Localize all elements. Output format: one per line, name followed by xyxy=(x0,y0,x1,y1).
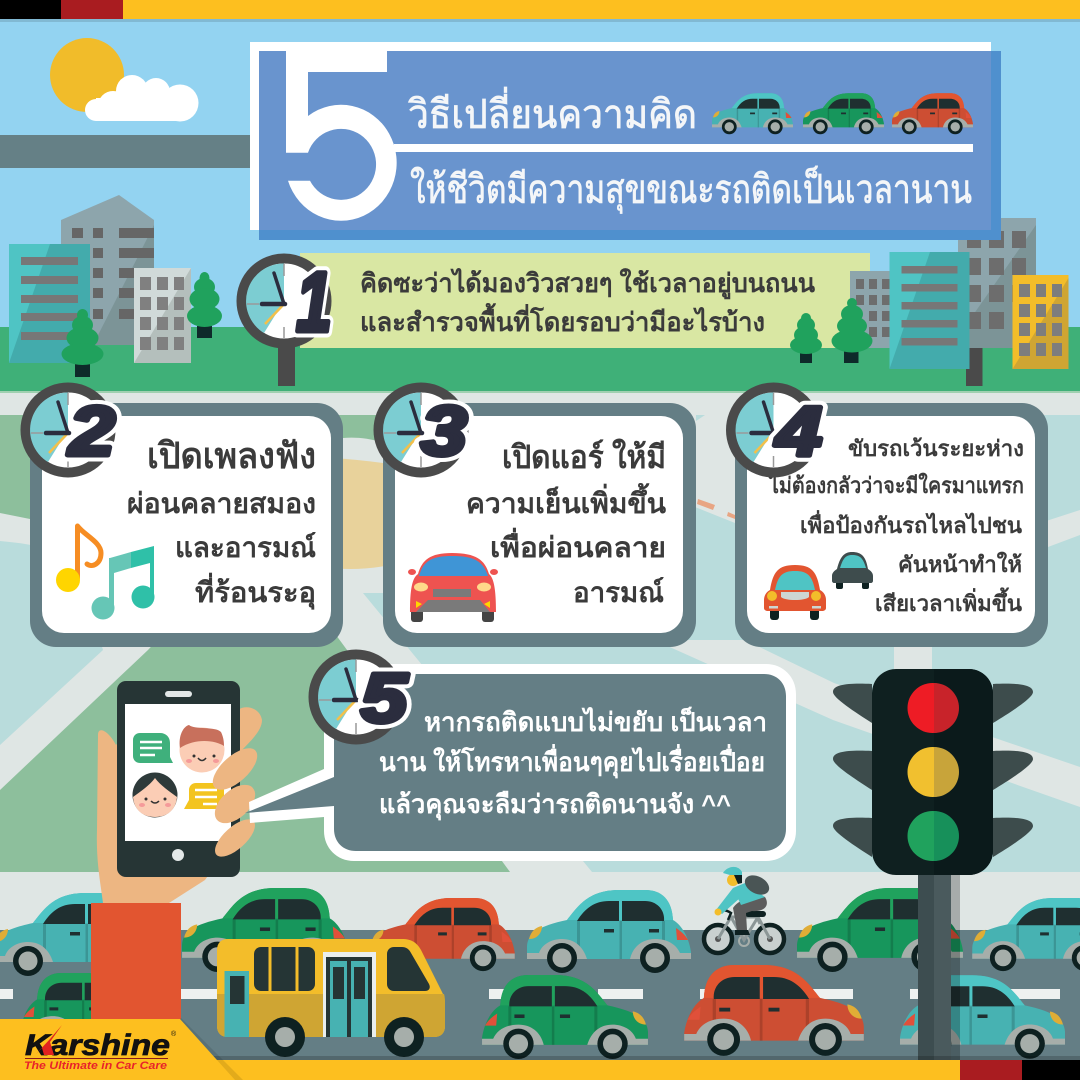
title cars xyxy=(712,93,973,134)
panel 4: keep distance xyxy=(735,403,1048,647)
red car front icon xyxy=(408,553,498,622)
panel 5 text: นาน ให้โทรหาเพื่อนๆคุยไปเรื่อยเปื่อย xyxy=(379,743,765,779)
step 1 text xyxy=(360,267,815,337)
clock badge 5: 5 xyxy=(361,659,408,737)
logo area: Karshine xyxy=(25,1029,170,1062)
clock badge 3: 3 xyxy=(421,392,467,470)
panel 5 text xyxy=(379,706,767,821)
panel 4 text: เพื่อป้องกันรถไหลไปชน xyxy=(800,509,1022,538)
panel 4 text xyxy=(767,436,1024,616)
panel 3 text: เพื่อผ่อนคลาย xyxy=(490,527,666,563)
panel 2 text: ผ่อนคลายสมอง xyxy=(127,488,316,519)
red and dark cars icon xyxy=(764,552,873,620)
panel 2 text: เปิดเพลงฟัง xyxy=(147,435,316,476)
panel 3: air conditioning xyxy=(383,403,696,647)
bottom bar xyxy=(0,1056,1080,1080)
music notes icon xyxy=(56,526,154,620)
sun xyxy=(50,38,124,112)
sky background xyxy=(0,0,1080,340)
cyclist xyxy=(704,867,784,953)
top bar xyxy=(0,0,1080,22)
panel 3 text: ความเย็นเพิ่มขึ้น xyxy=(466,482,666,519)
left buildings xyxy=(9,195,191,363)
clock badge 5: 5 xyxy=(361,659,408,737)
panel 2 text: และอารมณ์ xyxy=(175,532,316,563)
title block: วิธีเปลี่ยนความคิด xyxy=(408,87,697,137)
logo area: ® xyxy=(171,1030,177,1038)
clock badge 5 xyxy=(314,654,408,740)
panel 4 text: ขับรถเว้นระยะห่าง xyxy=(848,436,1024,461)
clock badge 4: 4 xyxy=(774,392,822,470)
clock badge 3 xyxy=(378,388,467,472)
lane markings xyxy=(0,989,1060,999)
panel 5 text: หากรถติดแบบไม่ขยับ เป็นเวลา xyxy=(424,706,767,737)
title block xyxy=(250,42,1001,240)
overpass xyxy=(0,135,250,168)
hand holding phone xyxy=(91,681,264,1019)
clock badge 2 xyxy=(26,388,115,472)
right buildings xyxy=(850,218,1068,386)
tree front left xyxy=(62,309,104,377)
band behind step 1 xyxy=(300,253,870,348)
speech panel 5 xyxy=(245,664,796,861)
panel 2: music xyxy=(30,403,343,647)
top row cars xyxy=(0,888,1080,976)
step 1 clock sign: 1 xyxy=(296,255,332,349)
tree right of left buildings xyxy=(187,272,222,338)
bottom row cars xyxy=(21,965,1065,1059)
step 1 text: คิดซะว่าได้มองวิวสวยๆ ใช้เวลาอยู่บนถนน xyxy=(360,267,815,300)
step 1 text: และสำรวจพื้นที่โดยรอบว่ามีอะไรบ้าง xyxy=(360,302,765,337)
sleeve xyxy=(91,903,181,1019)
logo area xyxy=(0,1018,243,1080)
step 1 clock sign xyxy=(242,255,332,386)
panel 2 text xyxy=(127,435,316,610)
bus xyxy=(217,939,445,1057)
right trees xyxy=(790,298,872,363)
panel 2 text: ที่ร้อนระอุ xyxy=(195,572,316,610)
map background with roads xyxy=(0,391,1080,931)
clock badge 2: 2 xyxy=(67,392,115,470)
chat avatars xyxy=(132,725,224,818)
big number 5 xyxy=(286,51,397,221)
panel 5 text: แล้วคุณจะลืมว่ารถติดนานจัง ^^ xyxy=(379,789,731,821)
step 1 clock sign: 1 xyxy=(296,255,332,349)
panel 4 text: เสียเวลาเพิ่มขึ้น xyxy=(875,587,1022,616)
phone xyxy=(117,681,240,877)
clock badge 2: 2 xyxy=(67,392,115,470)
fingers xyxy=(206,741,264,863)
panel 3 text xyxy=(466,438,666,608)
road xyxy=(0,930,1080,1060)
clock badge 4: 4 xyxy=(774,392,822,470)
panel 4 text: ไม่ต้องกลัวว่าจะมีใครมาแทรก xyxy=(767,472,1024,498)
cloud xyxy=(85,75,198,122)
panel 3 text: อารมณ์ xyxy=(573,577,664,608)
panel 3 text: เปิดแอร์ ให้มี xyxy=(502,438,666,475)
traffic light xyxy=(833,669,1033,1060)
clock badge 3: 3 xyxy=(421,392,467,470)
clock badge 4 xyxy=(731,388,822,472)
logo area: The Ultimate in Car Care xyxy=(24,1060,167,1072)
ground xyxy=(0,327,1080,391)
panel 4 text: คันหน้าทำให้ xyxy=(898,551,1022,577)
